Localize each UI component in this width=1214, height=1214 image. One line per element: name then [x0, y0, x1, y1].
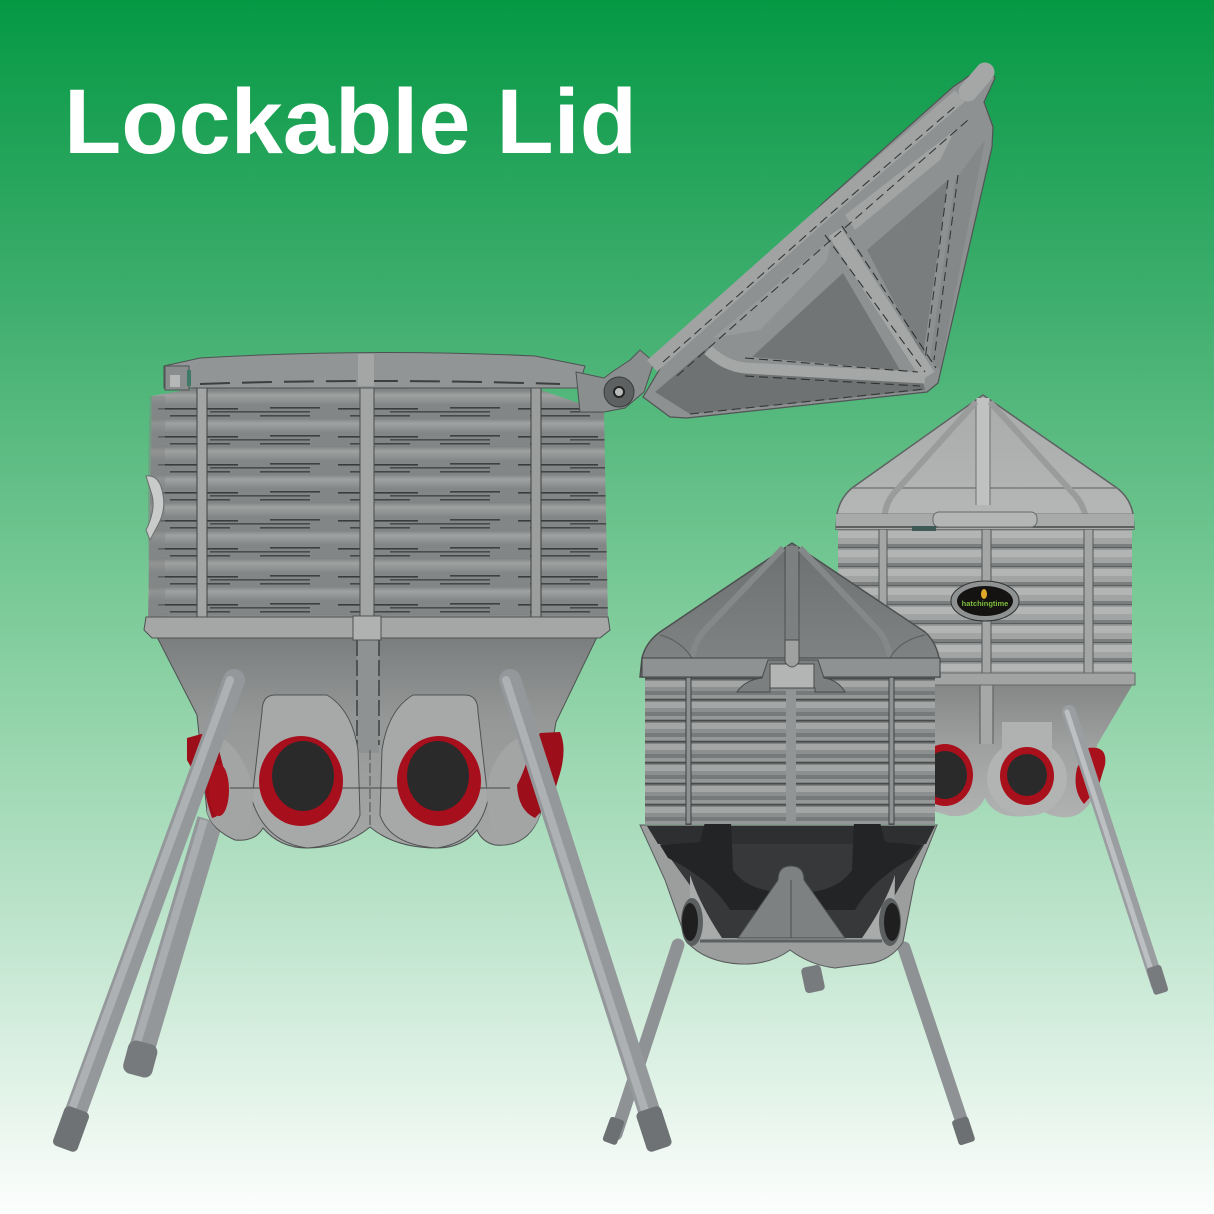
top rim — [164, 352, 585, 390]
side latch — [146, 476, 164, 540]
front right feeder lid and latch — [640, 543, 940, 692]
side port left — [187, 733, 229, 818]
body collar — [144, 617, 610, 638]
outlet lobes — [252, 695, 360, 848]
back feeder ribbed body — [836, 528, 1135, 685]
front right leg — [506, 680, 673, 1153]
hatchingtime logo badge — [951, 581, 1019, 621]
hopper with feed ports — [157, 637, 597, 848]
centre cone — [738, 866, 845, 938]
front left leg — [52, 680, 234, 1153]
back feeder hopper and red ports — [860, 684, 1133, 817]
back feeder leg — [1067, 712, 1169, 995]
front right feeder legs — [602, 945, 976, 1146]
front right feeder hopper — [640, 822, 937, 968]
open lid — [643, 65, 995, 418]
rear left leg — [121, 820, 210, 1079]
centre right port — [397, 736, 481, 826]
back feeder lid — [836, 395, 1134, 531]
front legs — [52, 680, 673, 1153]
back feeder, closed lid with logo — [801, 395, 1169, 995]
hatchingtime logo badge: hatchingtime — [962, 599, 1008, 608]
centre left port — [259, 736, 343, 826]
front right feeder ribbed body — [645, 677, 935, 824]
side port right — [517, 732, 564, 818]
back feeder rear foot — [801, 964, 825, 994]
front right feeder, closed lid — [602, 543, 976, 1146]
lid ribs — [835, 232, 928, 376]
title: Lockable Lid — [64, 71, 637, 173]
lid panels — [752, 273, 900, 370]
lower dark band — [655, 348, 925, 414]
centre support rib — [357, 637, 379, 753]
large open feeder — [52, 65, 995, 1153]
hinge — [576, 350, 654, 412]
ribbed cylinder body — [144, 386, 610, 640]
